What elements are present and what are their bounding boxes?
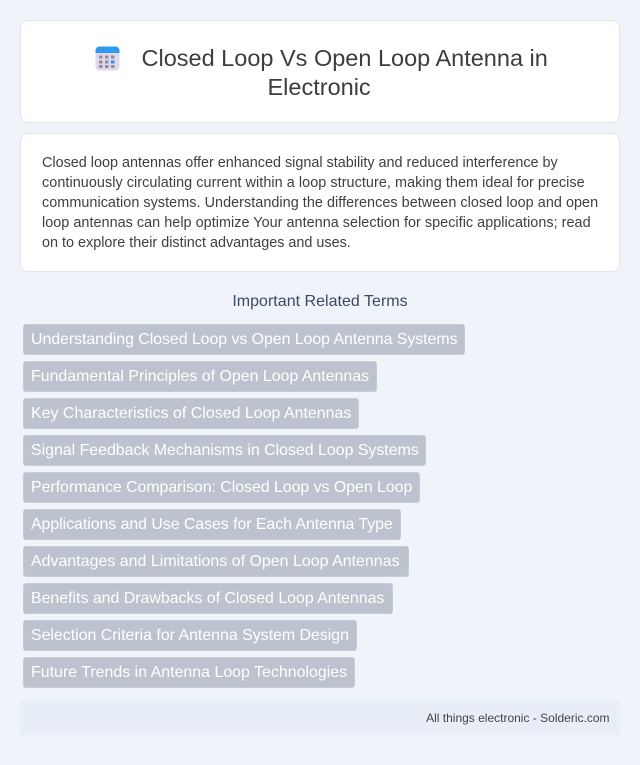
term 9: Selection Criteria for Antenna System Design (31, 627, 349, 644)
intro text: continuously circulating current within a loop structure, making them ideal for precise (42, 175, 585, 191)
intro panel (20, 133, 620, 272)
title: Closed Loop Vs Open Loop Antenna in (142, 45, 548, 71)
footer bar (20, 701, 620, 735)
intro text: communication systems. Understanding the differences between closed loop and open (42, 195, 598, 211)
term 3 (23, 398, 359, 429)
term 2: Fundamental Principles of Open Loop Antennas (31, 368, 369, 385)
icon: calendar (96, 46, 120, 70)
term 2 (23, 361, 377, 392)
term 7: Advantages and Limitations of Open Loop Antennas (31, 553, 400, 570)
term 7 (23, 546, 409, 577)
term 6 (23, 509, 401, 540)
term 4 (23, 435, 426, 466)
term 9 (23, 620, 357, 651)
term 6: Applications and Use Cases for Each Antenna Type (31, 516, 393, 533)
term 3: Key Characteristics of Closed Loop Antennas (31, 405, 351, 422)
intro text: Closed loop antennas offer enhanced signal stability and reduced interference by (42, 155, 558, 171)
term 5 (23, 472, 420, 503)
related terms list (23, 324, 465, 688)
term 1: Understanding Closed Loop vs Open Loop Antenna Systems (31, 331, 457, 348)
header card (20, 20, 620, 123)
term 4: Signal Feedback Mechanisms in Closed Loop Systems (31, 442, 419, 459)
title: Electronic (268, 74, 371, 100)
term 5: Performance Comparison: Closed Loop vs Open Loop (31, 479, 412, 496)
term 1 (23, 324, 465, 355)
title (142, 45, 548, 100)
intro text: loop antennas can help optimize Your antenna selection for specific applications; read (42, 215, 591, 231)
intro text (42, 155, 598, 251)
section heading: Important Related Terms (232, 293, 408, 310)
term 10: Future Trends in Antenna Loop Technologies (31, 664, 347, 681)
footer bar: All things electronic - Solderic.com (426, 711, 610, 725)
term 10 (23, 657, 355, 688)
term 8: Benefits and Drawbacks of Closed Loop Antennas (31, 590, 384, 607)
term 8 (23, 583, 393, 614)
intro text: on to explore their distinct advantages and uses. (42, 235, 351, 251)
